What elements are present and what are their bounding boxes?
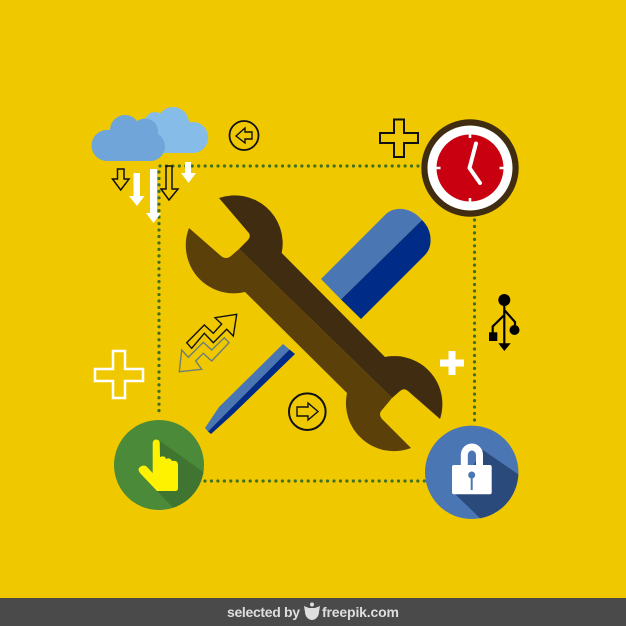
screwdriver — [205, 209, 431, 434]
icon: usb symbol — [489, 294, 520, 351]
icon: padlock in blue circle — [425, 426, 518, 519]
icon: clouds — [92, 107, 208, 161]
icon: black plus — [380, 120, 418, 157]
icon: hand in green circle — [114, 420, 204, 510]
footer text: selected by: selected by — [227, 604, 300, 620]
icon: small white plus — [440, 351, 464, 375]
wrench — [186, 195, 442, 451]
footer text: freepik.com: freepik.com — [322, 604, 399, 620]
footer bar — [0, 598, 626, 626]
front cloud — [92, 115, 165, 161]
screwdriver shaft — [205, 344, 295, 434]
screwdriver handle — [321, 209, 431, 319]
back cloud — [145, 107, 208, 153]
icon: freepik owl — [304, 602, 320, 620]
dotted frame — [159, 166, 474, 481]
icon: zigzag arrows — [179, 314, 237, 372]
icon: clock — [421, 119, 519, 217]
icon: left arrow in circle — [230, 121, 258, 150]
icon: outlined down arrows — [112, 166, 178, 200]
icon: white outlined plus — [95, 351, 143, 398]
icon: white down arrows — [129, 162, 196, 223]
icon: right arrow in circle — [289, 393, 326, 430]
